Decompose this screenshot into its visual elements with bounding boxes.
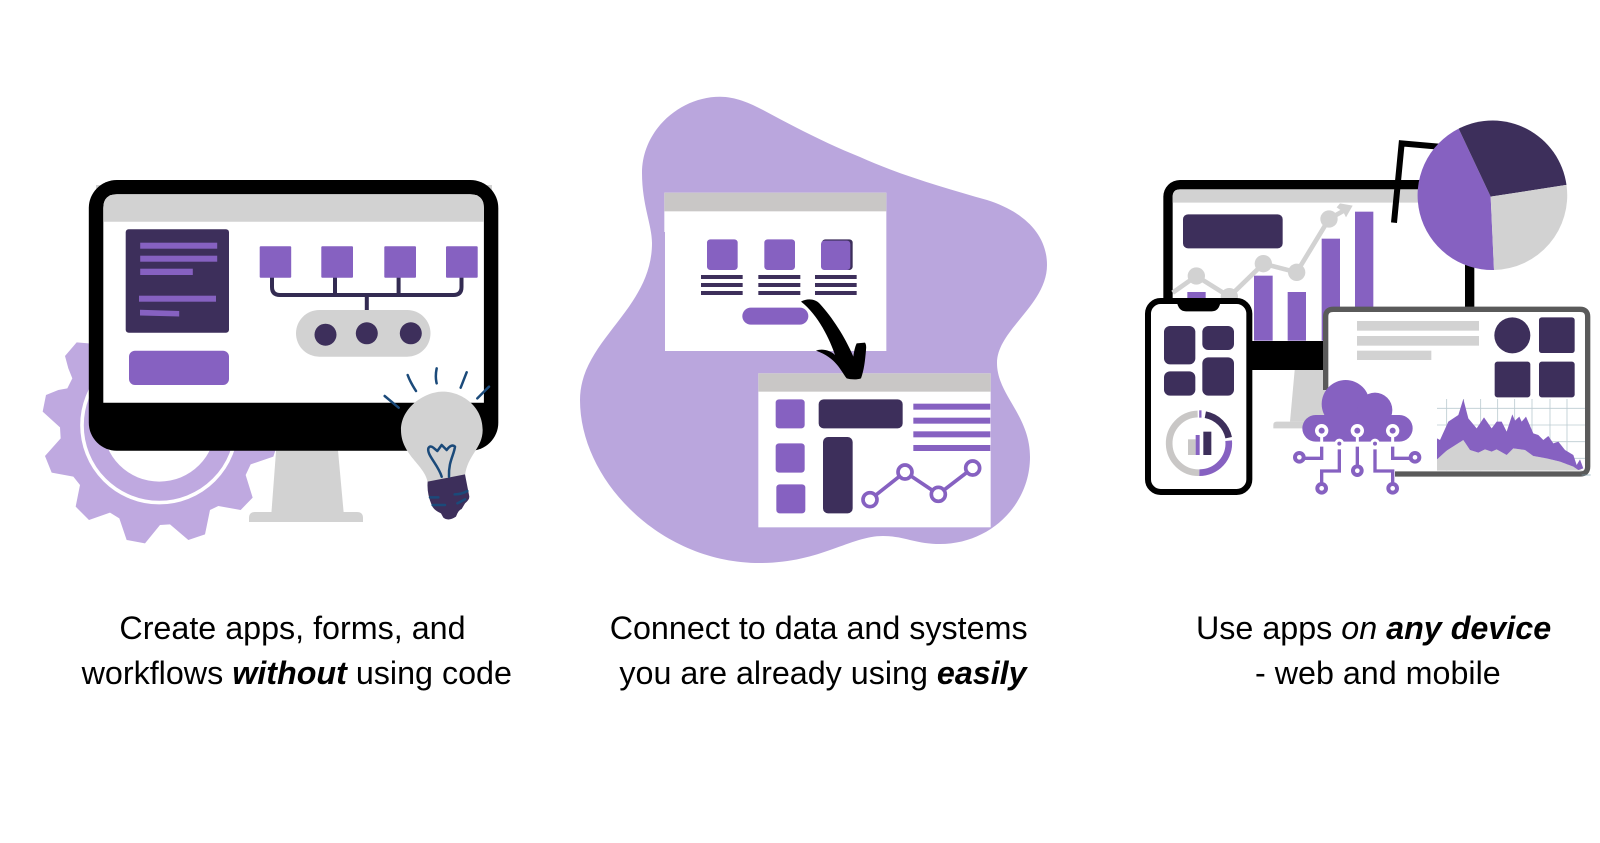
monitor (89, 180, 498, 451)
panel: multi-device illustration (1148, 121, 1591, 492)
line chart (863, 461, 980, 507)
caption: create apps: Create apps, forms, and (119, 610, 466, 646)
caption: connect data: you are already using easily (619, 655, 1027, 691)
panel: no-code app builder illustration (43, 180, 498, 543)
arrow (801, 299, 866, 379)
area chart (1437, 399, 1591, 475)
panel: data connection illustration (580, 97, 1047, 563)
target window (758, 373, 991, 527)
background blob (580, 97, 1047, 563)
workflow connector (272, 275, 462, 311)
bar chart (1187, 212, 1373, 341)
source window (664, 193, 886, 351)
icon: light bulb (385, 368, 489, 519)
smartphone (1148, 301, 1249, 492)
workflow squares (260, 246, 478, 278)
form button (129, 351, 229, 385)
desktop monitor (1163, 180, 1474, 428)
icon: gear (43, 342, 277, 543)
icon: cloud circuit (1295, 380, 1419, 493)
pie chart (1418, 121, 1567, 270)
caption: connect data: Connect to data and systems (610, 610, 1028, 646)
donut chart (1169, 410, 1229, 473)
caption: create apps: workflows without using code (82, 655, 512, 691)
trend line (1173, 203, 1353, 305)
workflow pill with dots (296, 310, 430, 357)
caption: any device: - web and mobile (1255, 655, 1501, 691)
dark form panel (126, 229, 229, 333)
tablet (1326, 309, 1588, 474)
caption: any device: Use apps on any device (1196, 610, 1551, 646)
monitor stand (249, 445, 363, 522)
black bracket (1394, 143, 1438, 223)
